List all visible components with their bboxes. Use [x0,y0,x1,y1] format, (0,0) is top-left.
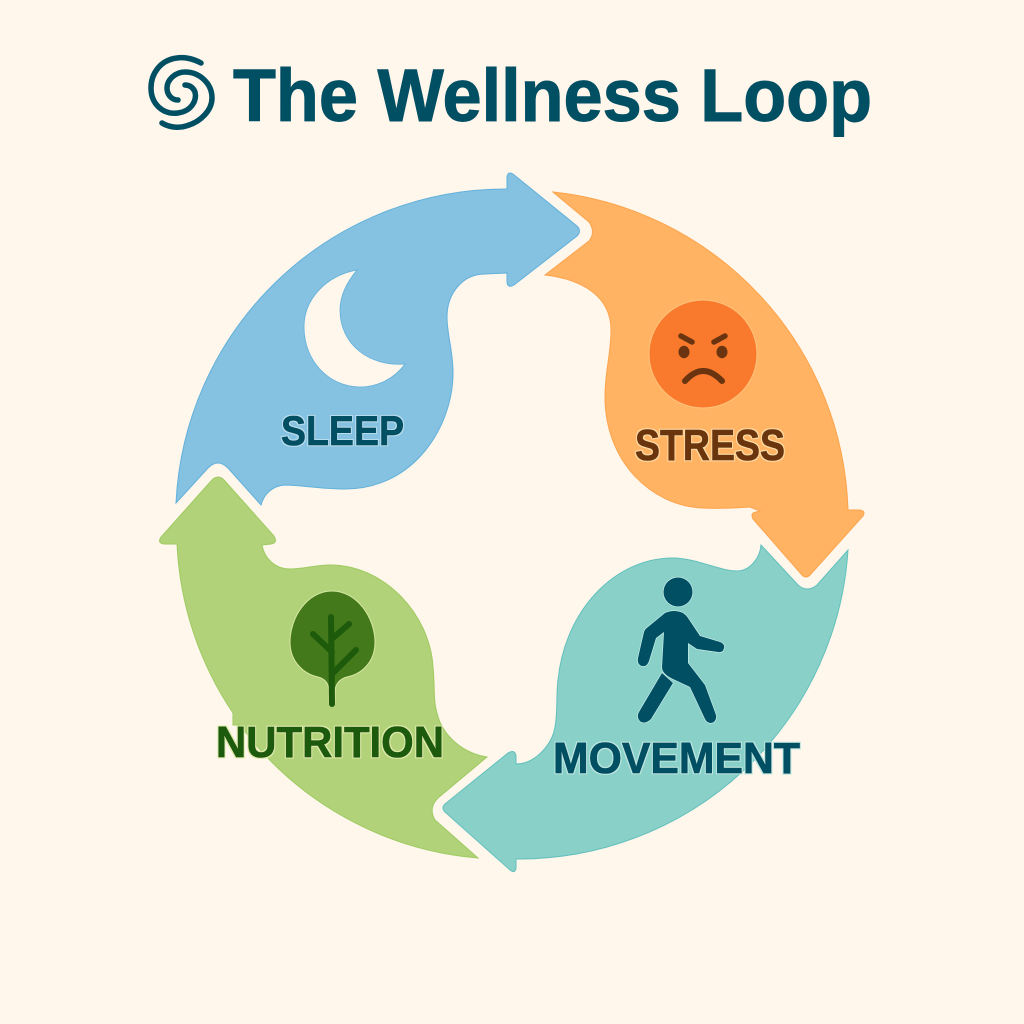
label: movement: MOVEMENT [553,734,800,783]
label: stress: STRESS [635,421,785,470]
icon: walking person [638,578,724,723]
title text: The Wellness Loop [233,54,872,137]
sleep arrow shape [176,173,580,505]
label: nutrition: NUTRITION [216,718,444,767]
panel: stress arrow [545,192,864,577]
panel: sleep arrow [176,173,580,505]
panel: movement arrow [443,545,848,872]
title [151,54,872,137]
movement arrow shape [443,545,848,872]
icon: leaf [290,591,375,706]
panel: nutrition arrow [160,477,487,858]
icon: spiral logo [151,58,212,127]
icon: angry face [649,300,757,408]
stress arrow shape [545,192,864,577]
nutrition arrow shape [160,477,487,858]
label: sleep: SLEEP [281,407,404,454]
icon: crescent moon [304,270,405,387]
